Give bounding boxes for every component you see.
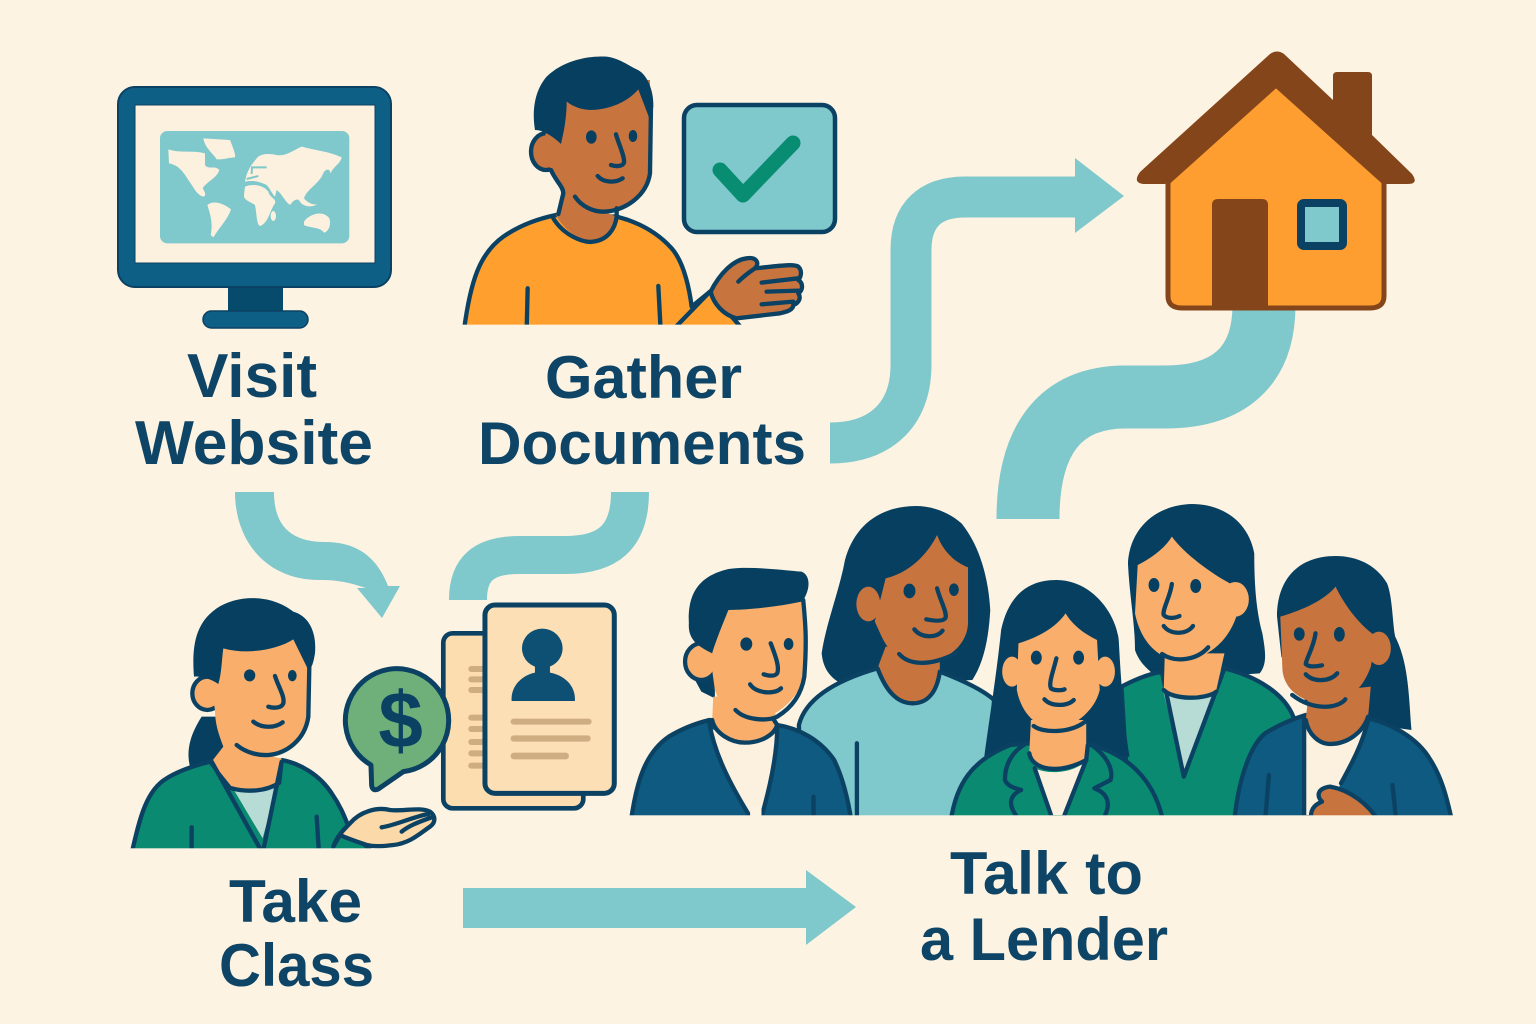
person: woman in teal (799, 506, 994, 822)
heading: Visit Website: Visit (187, 342, 317, 411)
icon: dollar speech bubble: $ (378, 675, 423, 764)
icon: house (1137, 52, 1415, 308)
heading: Take Class: Class (219, 932, 374, 999)
person: woman in center (951, 580, 1163, 822)
heading: Take Class (219, 868, 374, 999)
arrow: class to lender (463, 870, 856, 945)
heading: Take Class: Take (229, 868, 362, 935)
figure: woman taking class (128, 598, 434, 859)
hand (711, 258, 802, 318)
heading: Gather Documents: Gather (545, 344, 742, 411)
heading: Talk to a Lender: a Lender (920, 906, 1168, 973)
icon: computer monitor with world map (118, 87, 391, 328)
icon: dollar speech bubble (345, 669, 449, 790)
person: man in blue jacket (631, 568, 851, 822)
icon: checkmark card (684, 105, 835, 232)
figure: man with checklist (460, 56, 802, 336)
person: woman in green cardigan (1121, 504, 1293, 822)
figure: group of lenders (615, 504, 1477, 832)
arrow: documents to class (468, 492, 630, 600)
heading: Gather Documents: Documents (478, 410, 806, 477)
arrow: website to class (235, 492, 400, 618)
heading: Visit Website: Website (135, 409, 373, 478)
person: woman in blue jacket (1234, 556, 1452, 822)
world map (160, 131, 349, 243)
heading: Visit Website (135, 342, 373, 478)
icon: resume documents (443, 605, 614, 808)
heading: Talk to a Lender (920, 840, 1168, 973)
heading: Talk to a Lender: Talk to (950, 840, 1143, 907)
arrow: documents to house (830, 158, 1124, 443)
heading: Gather Documents (478, 344, 806, 477)
arrow: lender to house (1028, 305, 1264, 519)
